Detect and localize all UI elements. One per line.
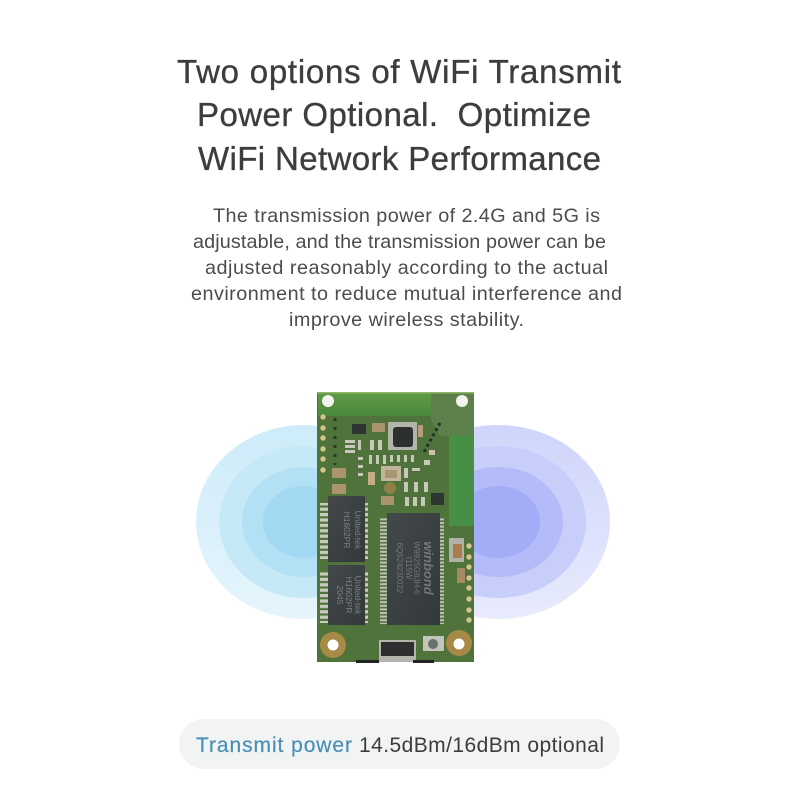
mounting holes [320,395,472,658]
inductor [388,422,417,450]
winbond memory chip: I115W [404,557,413,580]
ethernet transformer chips: H1602PR [342,512,352,548]
push button [423,636,444,651]
description text block: adjusted reasonably according to the actual [205,257,608,279]
ethernet transformer chips: H1602PR [344,577,354,613]
description text block: environment to reduce mutual interference and [191,283,622,305]
description text block: adjustable, and the transmission power can be [193,231,606,253]
transmit power pill [179,719,620,769]
ethernet transformer chips: 2045 [335,586,345,605]
title: WiFi Network Performance [198,140,601,177]
signal waves: right purple [386,425,610,619]
edge pads [320,414,472,623]
pill value: 14.5dBm/16dBm optional [359,734,604,757]
winbond memory chip [380,513,444,625]
title: Power Optional. Optimize [197,96,591,133]
ethernet transformer chips: United-tek [353,576,363,615]
small components [332,418,444,506]
circuit board module [317,392,474,663]
pill label: Transmit power [196,734,352,757]
title [177,53,621,177]
ethernet transformer chips [320,496,368,625]
winbond memory chip: 6Q524230022 [395,543,404,594]
ethernet transformer chips: United-tek [353,511,363,550]
capacitors [449,538,465,583]
title: Two options of WiFi Transmit [177,53,621,90]
winbond memory chip: W9925G6JH-6 [412,542,421,595]
winbond memory chip: winbond [421,541,436,596]
ethernet connector notch [356,640,434,663]
description text block: The transmission power of 2.4G and 5G is [213,205,600,227]
signal waves: left blue [196,425,412,619]
description text block: improve wireless stability. [289,309,524,331]
description text block [191,205,622,331]
